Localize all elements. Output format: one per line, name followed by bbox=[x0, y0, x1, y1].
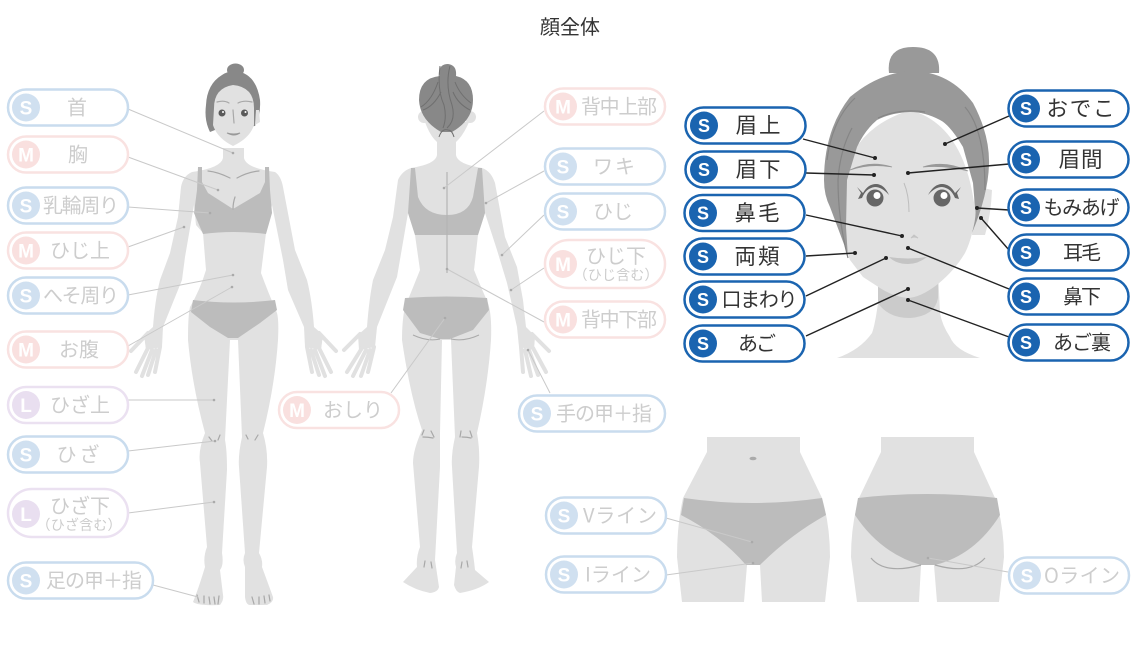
label: ひじ下 bbox=[545, 240, 665, 288]
label: Iライン: Iライン bbox=[585, 558, 651, 588]
head bbox=[206, 64, 260, 146]
label: 首: 首 bbox=[67, 92, 87, 120]
label: へそ周り: へそ周り bbox=[43, 280, 119, 308]
label: 眉間: S bbox=[1020, 150, 1032, 170]
label: ひざ: ひざ bbox=[56, 438, 100, 468]
label: お腹: お腹 bbox=[59, 334, 99, 362]
hair bun bbox=[227, 64, 244, 76]
label: へそ周り: S bbox=[20, 286, 32, 308]
label: ひじ: ひじ bbox=[593, 196, 633, 224]
figure: back body bbox=[344, 64, 549, 593]
hair back bbox=[206, 71, 260, 132]
labels: middle column bbox=[279, 88, 1129, 594]
label: ひざ: S bbox=[20, 446, 32, 466]
figure: front body bbox=[131, 64, 336, 605]
label: ひじ上: M bbox=[18, 242, 34, 262]
label: Oライン: Oライン bbox=[1044, 560, 1120, 588]
left hand bbox=[344, 327, 377, 376]
label: お腹: M bbox=[18, 340, 34, 362]
hair side strands bbox=[827, 98, 985, 258]
label: Oライン bbox=[1009, 558, 1129, 594]
label: 口まわり: S bbox=[697, 290, 709, 310]
labels: face right column bbox=[1008, 90, 1128, 360]
hair bun bbox=[889, 47, 939, 73]
panties bbox=[191, 300, 277, 338]
label: 胸: 胸 bbox=[68, 138, 88, 168]
panties bbox=[855, 494, 1000, 565]
label: ひざ下: ひざ下 bbox=[50, 490, 110, 519]
face bbox=[213, 85, 254, 146]
label: 眉上: 眉上 bbox=[736, 109, 780, 140]
label: 手の甲＋指: 手の甲＋指 bbox=[556, 398, 652, 426]
figure: hips front bbox=[677, 437, 830, 602]
label: ひじ下: M bbox=[555, 255, 571, 276]
panties bbox=[681, 498, 826, 565]
label: あご: S bbox=[697, 334, 709, 354]
right hand bbox=[304, 327, 336, 376]
hair bbox=[824, 71, 989, 258]
label: 鼻下 bbox=[1008, 278, 1128, 314]
neck and shoulders bbox=[837, 270, 980, 358]
label: ひざ下: L bbox=[20, 505, 32, 526]
face skin bbox=[846, 110, 975, 298]
label: Iライン bbox=[546, 556, 666, 592]
label: ひざ下: （ひざ含む） bbox=[36, 515, 122, 535]
label: Iライン: S bbox=[558, 566, 570, 586]
ear bbox=[255, 110, 260, 125]
label: ひじ bbox=[545, 194, 665, 230]
label: 乳輪周り: 乳輪周り bbox=[43, 190, 119, 218]
nose bbox=[904, 183, 909, 212]
navel bbox=[750, 457, 756, 460]
label: 背中下部 bbox=[545, 302, 665, 338]
label: 鼻毛 bbox=[684, 195, 804, 231]
leader lines: face bbox=[803, 116, 1009, 337]
label: もみあげ bbox=[1008, 190, 1128, 226]
label: 眉間: 眉間 bbox=[1058, 143, 1102, 174]
leader lines: faded bbox=[128, 109, 1008, 597]
right eye bbox=[928, 184, 961, 206]
label: 足の甲＋指: S bbox=[20, 572, 32, 592]
label: Vライン: Vライン bbox=[583, 500, 657, 528]
label: もみあげ: S bbox=[1020, 198, 1032, 218]
label: あご裏 bbox=[1008, 324, 1128, 360]
label: 背中上部: M bbox=[555, 98, 571, 118]
label: おでこ bbox=[1008, 90, 1128, 126]
label: へそ周り bbox=[8, 278, 128, 314]
label: 足の甲＋指: 足の甲＋指 bbox=[46, 564, 142, 594]
label: あご: あご bbox=[738, 328, 776, 356]
label: ひざ上 bbox=[8, 387, 128, 423]
label: 首: S bbox=[20, 98, 32, 120]
labels: face left column bbox=[684, 108, 806, 362]
label: 耳毛 bbox=[1008, 234, 1128, 270]
label: 耳毛: S bbox=[1020, 243, 1032, 263]
label: ひじ上 bbox=[8, 232, 128, 268]
label: ワキ: ワキ bbox=[593, 150, 635, 180]
label: 鼻下: 鼻下 bbox=[1063, 280, 1101, 310]
left eye bbox=[857, 184, 889, 206]
label: ひざ上: ひざ上 bbox=[50, 389, 110, 418]
label: 眉下 bbox=[686, 152, 806, 188]
hair bbox=[419, 64, 473, 132]
label: おしり bbox=[279, 392, 399, 428]
mouth bbox=[889, 257, 927, 264]
label: ひじ: S bbox=[557, 202, 569, 224]
bra bbox=[194, 167, 272, 234]
label: お腹 bbox=[8, 332, 128, 368]
label: 背中上部 bbox=[545, 88, 665, 124]
ears bbox=[418, 111, 430, 123]
figure: hips back bbox=[851, 437, 1004, 602]
label: おでこ: S bbox=[1020, 99, 1032, 119]
label: 眉間 bbox=[1008, 142, 1128, 178]
label: Vライン: S bbox=[558, 506, 570, 528]
label: ワキ bbox=[545, 148, 665, 184]
label: ひざ下 bbox=[8, 489, 128, 537]
label: 眉上 bbox=[686, 108, 806, 144]
label: ひざ上: L bbox=[20, 396, 32, 417]
label: 両頬: 両頬 bbox=[734, 240, 780, 271]
label: 眉下: S bbox=[698, 160, 710, 180]
label: 鼻毛: S bbox=[697, 204, 709, 224]
mouth bbox=[227, 133, 240, 135]
label: あご bbox=[684, 326, 804, 362]
label: おでこ: おでこ bbox=[1046, 92, 1114, 123]
bra back bbox=[408, 168, 485, 235]
label: 乳輪周り bbox=[8, 188, 128, 224]
labels: left column bbox=[8, 90, 153, 598]
label: 背中下部: 背中下部 bbox=[581, 304, 657, 332]
neck shadow bbox=[878, 283, 938, 318]
label: 乳輪周り: S bbox=[20, 196, 32, 218]
label: 足の甲＋指 bbox=[8, 562, 153, 598]
label: 眉上: S bbox=[698, 116, 710, 136]
label: あご裏: S bbox=[1020, 333, 1032, 353]
label: 手の甲＋指 bbox=[519, 396, 665, 432]
panties back bbox=[403, 296, 489, 339]
label: 両頬 bbox=[684, 238, 804, 274]
label: もみあげ: もみあげ bbox=[1044, 192, 1120, 220]
label: おしり: おしり bbox=[323, 394, 383, 423]
figure: face bbox=[824, 47, 992, 358]
label: Oライン: S bbox=[1021, 566, 1033, 588]
label: 鼻下: S bbox=[1020, 287, 1032, 307]
label: ひじ下: ひじ下 bbox=[586, 240, 646, 269]
right hand bbox=[517, 327, 549, 376]
label: ひざ bbox=[8, 436, 128, 472]
label: 胸 bbox=[8, 136, 128, 172]
label: 口まわり: 口まわり bbox=[722, 284, 798, 312]
label: 両頬: S bbox=[697, 247, 709, 267]
eyebrows bbox=[850, 164, 968, 171]
label: 口まわり bbox=[684, 282, 804, 318]
label: 眉下: 眉下 bbox=[736, 153, 780, 184]
label: 手の甲＋指: S bbox=[531, 404, 543, 426]
label: 鼻毛: 鼻毛 bbox=[734, 196, 780, 228]
label: 背中上部: 背中上部 bbox=[581, 90, 657, 120]
label: ひじ上: ひじ上 bbox=[50, 234, 110, 264]
label: ひじ下: （ひじ含む） bbox=[574, 265, 658, 285]
label: 首 bbox=[8, 90, 128, 126]
ear bbox=[972, 186, 992, 235]
label: ワキ: S bbox=[557, 158, 569, 178]
left hand bbox=[131, 327, 163, 376]
label: あご裏: あご裏 bbox=[1053, 326, 1111, 356]
label: 耳毛: 耳毛 bbox=[1063, 236, 1101, 266]
label: 背中下部: M bbox=[555, 310, 571, 332]
label: おしり: M bbox=[289, 401, 305, 422]
label: Vライン bbox=[546, 498, 666, 534]
title: 顔全体 bbox=[540, 11, 600, 40]
label: 胸: M bbox=[18, 146, 34, 166]
